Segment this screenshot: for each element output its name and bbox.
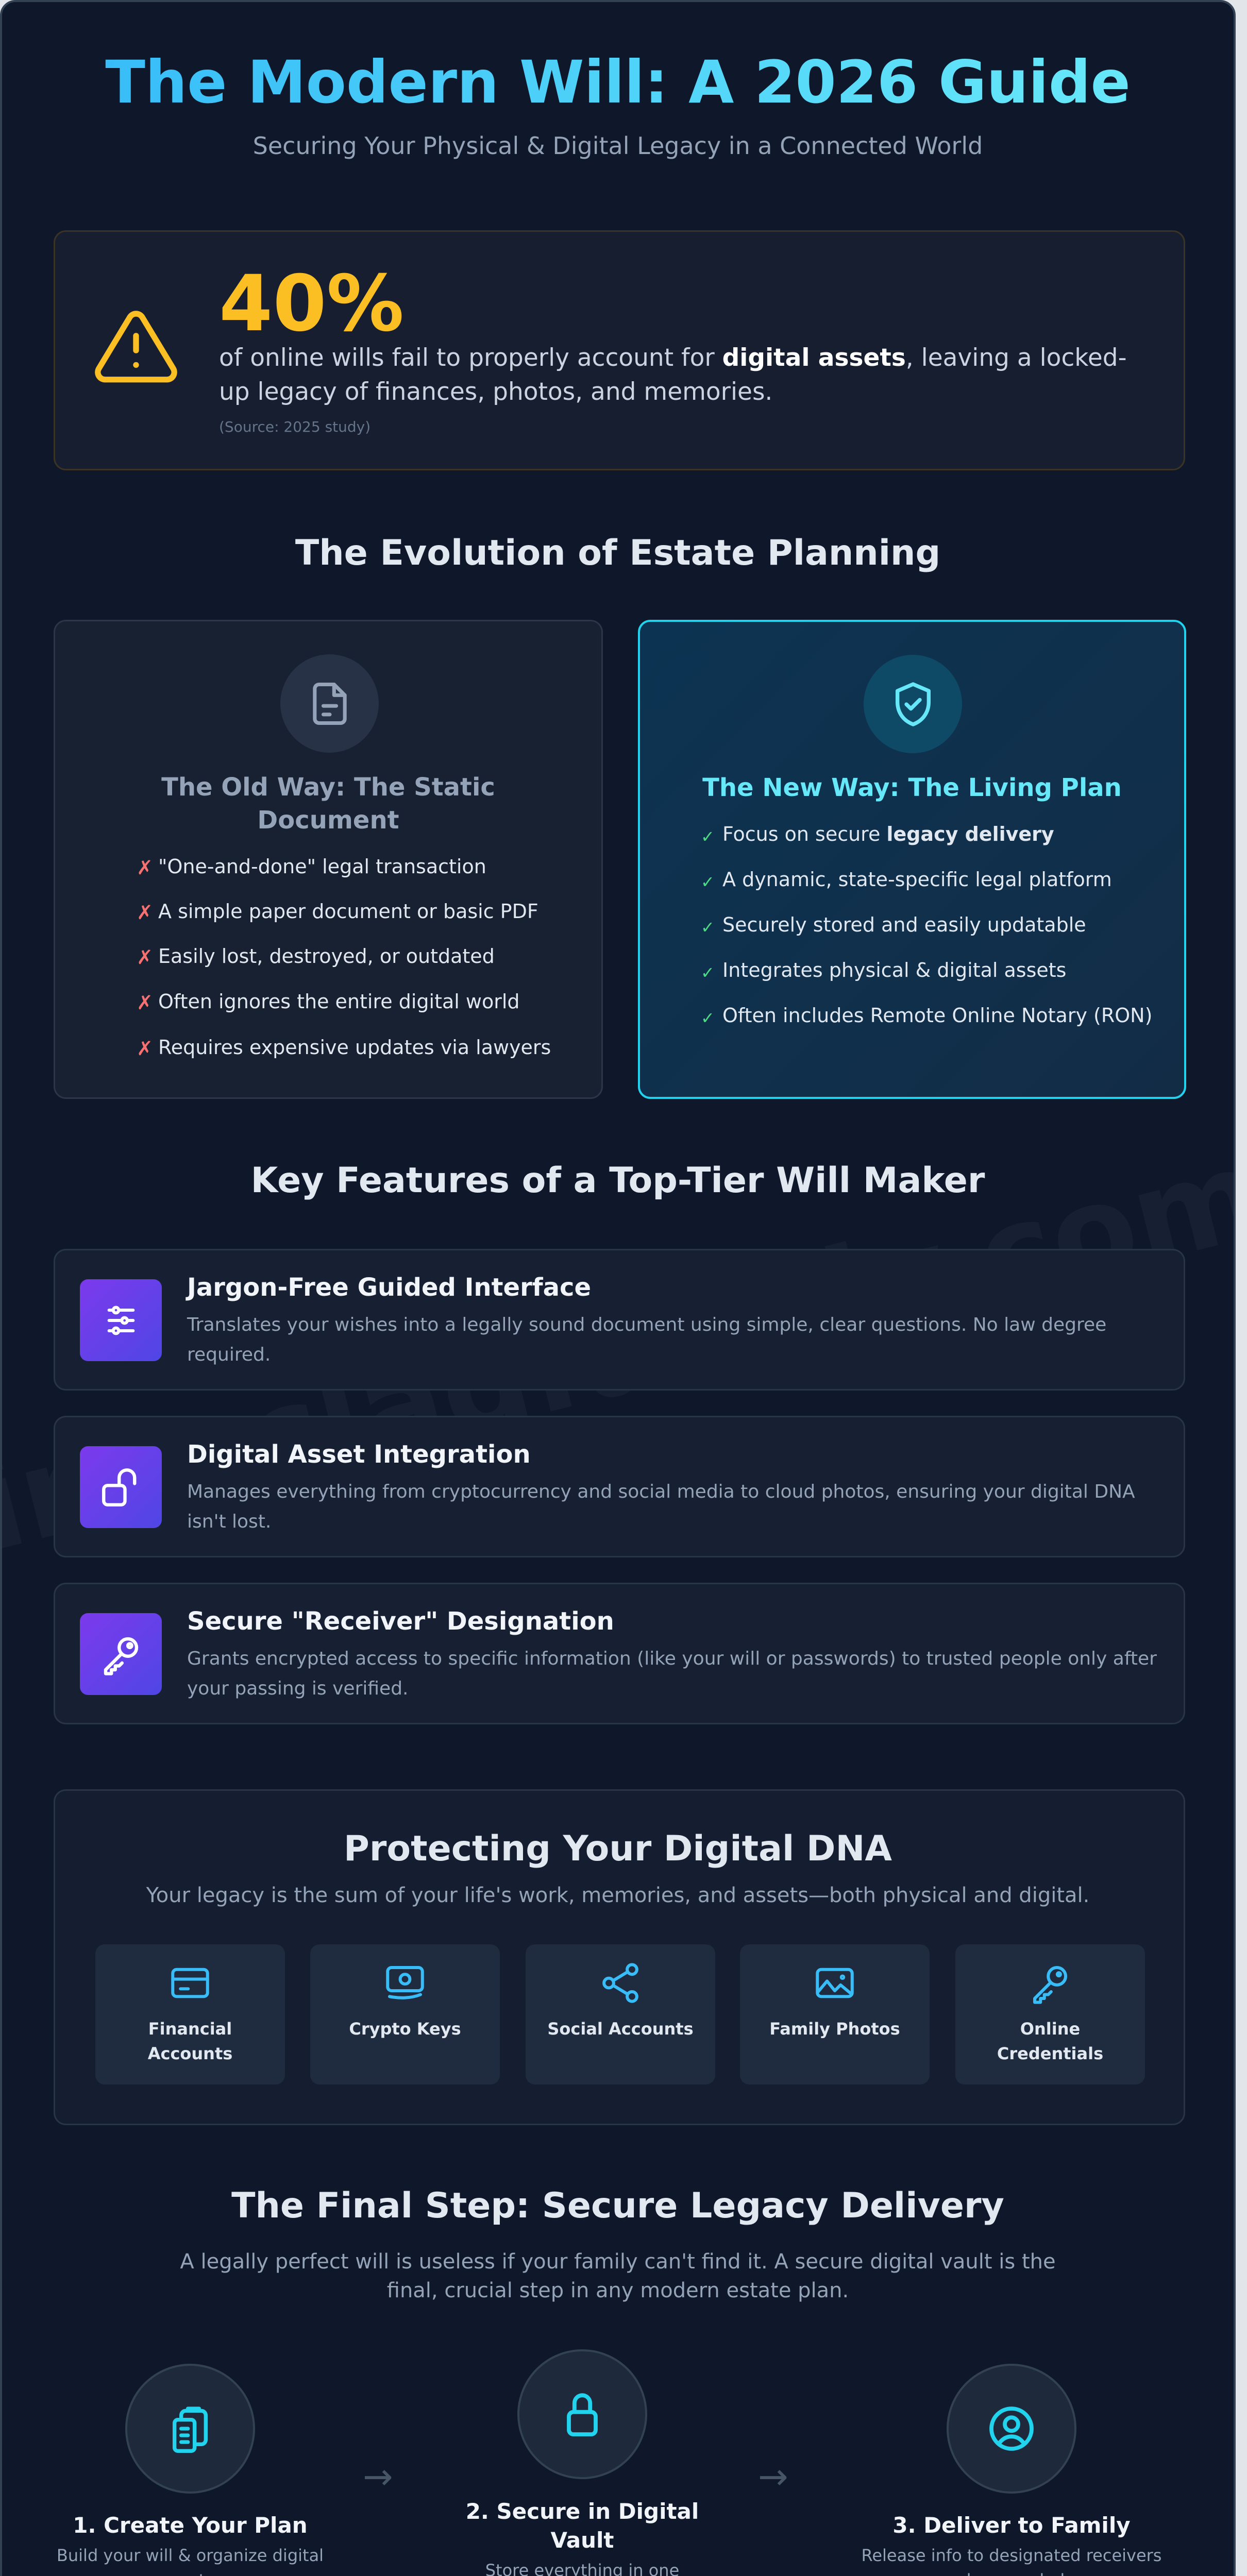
- heading old: The Old Way: The Static: [161, 773, 495, 802]
- step 3 text: [862, 2513, 1161, 2576]
- list old: Often ignores the entire digital world: [158, 990, 520, 1013]
- heading new: The New Way: The Living Plan: [702, 773, 1122, 802]
- feature: receiver: Secure "Receiver" Designation: [187, 1607, 614, 1636]
- tile: financial: Accounts: [148, 2044, 232, 2063]
- feature: jargon-free: Jargon-Free Guided Interface: [187, 1273, 591, 1302]
- list new: Often includes Remote Online Notary (RON): [722, 1004, 1152, 1027]
- icon: unlock: [80, 1446, 162, 1528]
- tile: photos: [740, 1944, 930, 2084]
- list old: ✗: [137, 856, 153, 879]
- feature: digital assets: Digital Asset Integration: [187, 1440, 531, 1469]
- list old: [137, 855, 551, 1060]
- list old: "One-and-done" legal transaction: [158, 855, 486, 878]
- stat number: 40%: [219, 259, 404, 349]
- tile: financial: [95, 1944, 285, 2084]
- feature: receiver: [54, 1583, 1185, 1724]
- final paragraph: A legally perfect will is useless if your family can't find it. A secure digital vault is the final, crucial step in any modern estate plan.: [180, 2250, 1056, 2302]
- step 2 circle: [517, 2349, 647, 2479]
- list old: ✗: [137, 946, 153, 969]
- DNA subtitle: Your legacy is the sum of your life's work, memories, and assets—both physical and digital.: [146, 1884, 1089, 1907]
- icon: document: [280, 654, 379, 753]
- tile: credentials: Credentials: [997, 2044, 1103, 2063]
- tile: social: Social Accounts: [547, 2019, 694, 2039]
- panel: digital DNA: [54, 1789, 1185, 2125]
- tile: social: [526, 1944, 715, 2084]
- heading: key features: Key Features of a Top-Tier Will Maker: [251, 1160, 985, 1201]
- list new: ✓: [701, 918, 715, 937]
- feature: jargon-free: Translates your wishes into a legally sound document using simple, clear questions. No law degree required.: [187, 1314, 1106, 1365]
- list new: Integrates physical & digital assets: [722, 959, 1066, 981]
- list new: ✓: [701, 963, 715, 982]
- list old: ✗: [137, 1037, 153, 1060]
- list new: ✓: [701, 827, 715, 846]
- icon: sliders: [80, 1279, 162, 1361]
- step 1 text: [57, 2513, 324, 2576]
- list new: ✓: [701, 872, 715, 892]
- step 3 circle: [947, 2364, 1076, 2494]
- list new: ✓: [701, 1008, 715, 1028]
- icon: key: [80, 1613, 162, 1695]
- step 1 circle: [125, 2364, 255, 2494]
- subtitle: Securing Your Physical & Digital Legacy in a Connected World: [253, 132, 983, 160]
- list old: ✗: [137, 991, 153, 1014]
- icon: warning: [95, 311, 177, 382]
- title: The Modern Will: A 2026 Guide: [105, 48, 1131, 116]
- panel: old way: [54, 620, 603, 1099]
- tile: credentials: [955, 1944, 1145, 2084]
- heading: evolution: The Evolution of Estate Planning: [295, 533, 940, 573]
- step 2 text: 2. Secure in Digital: [466, 2499, 699, 2524]
- list new: [701, 823, 1152, 1028]
- source: (Source: 2025 study): [219, 418, 370, 435]
- icon: shield: [864, 655, 962, 753]
- heading old: Document: [257, 806, 399, 835]
- list old: Easily lost, destroyed, or outdated: [158, 945, 495, 968]
- list old: A simple paper document or basic PDF: [158, 900, 538, 923]
- step 2 text: [466, 2499, 699, 2576]
- list new: A dynamic, state-specific legal platform: [722, 868, 1112, 891]
- step 1 text: 1. Create Your Plan: [73, 2513, 308, 2538]
- heading: final step: The Final Step: Secure Legacy Delivery: [231, 2185, 1004, 2226]
- arrow 2: →: [758, 2455, 788, 2498]
- list old: Requires expensive updates via lawyers: [158, 1036, 551, 1059]
- heading: digital DNA: Protecting Your Digital DNA: [344, 1828, 892, 1869]
- list old: ✗: [137, 901, 153, 924]
- list new: Securely stored and easily updatable: [722, 913, 1086, 936]
- tile: crypto: Crypto Keys: [349, 2019, 461, 2039]
- list new: Focus on secure legacy delivery: [722, 823, 1054, 845]
- tile: credentials: Online: [1020, 2019, 1080, 2039]
- feature: jargon-free: [54, 1249, 1185, 1391]
- step 2 text: Vault: [551, 2528, 614, 2553]
- feature: receiver: Grants encrypted access to specific information (like your will or passwords) to trusted people only after your passing is verified.: [187, 1648, 1157, 1699]
- tile: photos: Family Photos: [769, 2019, 900, 2039]
- tile: financial: Financial: [148, 2019, 232, 2039]
- stat text: of online wills fail to properly account for digital assets, leaving a locked-up legacy of finances, photos, and memories.: [219, 344, 1127, 406]
- heading old: [161, 773, 495, 835]
- panel: new way: [638, 620, 1186, 1099]
- tile: crypto: [310, 1944, 500, 2084]
- step 3 text: 3. Deliver to Family: [892, 2513, 1131, 2538]
- arrow 1: →: [363, 2455, 393, 2498]
- feature: digital assets: [54, 1416, 1185, 1557]
- feature: digital assets: Manages everything from cryptocurrency and social media to cloud photos, ensuring your digital DNA isn't lost.: [187, 1481, 1135, 1532]
- stat callout: [54, 230, 1185, 470]
